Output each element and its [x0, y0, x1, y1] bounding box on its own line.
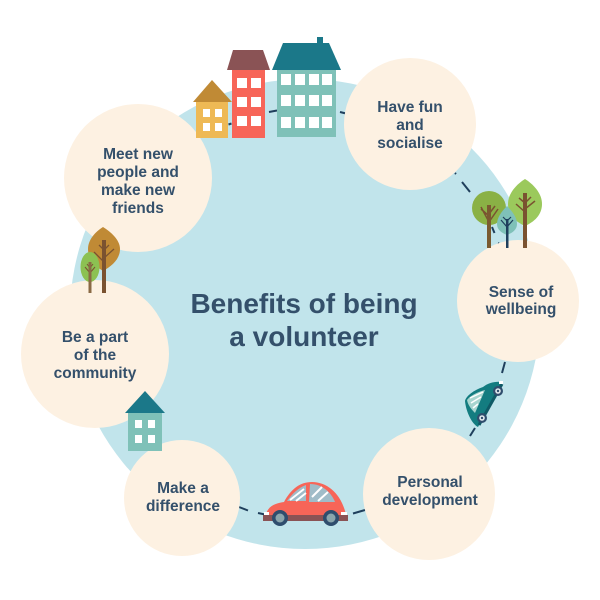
circle: be a part of the community [21, 280, 169, 428]
circle: personal development: Personal [397, 474, 463, 491]
icon: red car [263, 482, 348, 526]
circle: have fun: and [396, 117, 424, 134]
circle: personal development: development [382, 492, 478, 509]
icon: red apartment building [227, 50, 270, 138]
icon: teal apartment building [272, 37, 341, 137]
circle: meet new people [64, 104, 212, 252]
circle: sense of wellbeing [457, 240, 579, 362]
title: a volunteer [229, 321, 379, 352]
circle: have fun: Have fun [377, 99, 443, 116]
circle: sense of wellbeing: wellbeing [485, 301, 556, 318]
icon: small yellow house [193, 80, 232, 138]
icon: trees right [472, 179, 542, 248]
icon: trees left [80, 227, 120, 293]
circle: be a part of the community: community [54, 365, 137, 382]
circle: meet new people: make new [101, 182, 176, 199]
circle: make a difference [124, 440, 240, 556]
title: Benefits of being [190, 288, 418, 319]
circle: have fun: socialise [377, 135, 443, 152]
dashed connector ring [228, 110, 505, 514]
circle: have fun [344, 58, 476, 190]
circle: meet new people: people and [97, 164, 179, 181]
circle: sense of wellbeing: Sense of [489, 284, 554, 301]
circle: make a difference: difference [146, 498, 220, 515]
icon: teal car [465, 381, 503, 427]
circle: meet new people: friends [112, 200, 164, 217]
circle: meet new people: Meet new [103, 146, 174, 163]
circle: be a part of the community: of the [74, 347, 116, 364]
background circle [70, 79, 540, 549]
circle: personal development [363, 428, 495, 560]
icon: teal small house [125, 391, 165, 451]
circle: be a part of the community: Be a part [62, 329, 128, 346]
circle: make a difference: Make a [157, 480, 209, 497]
